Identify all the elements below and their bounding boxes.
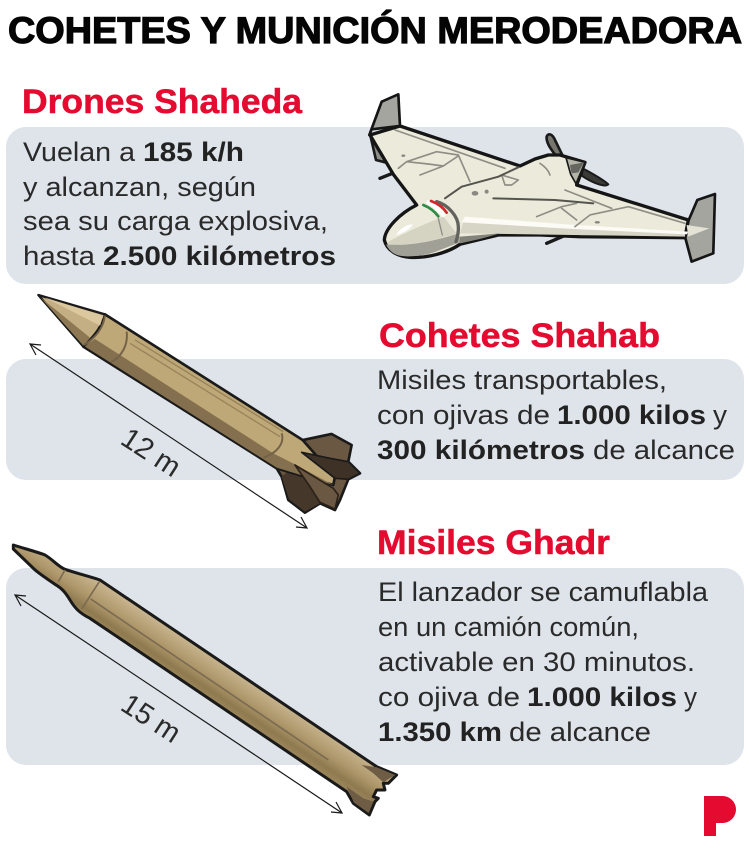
label: 15 m: 15 m <box>115 688 186 750</box>
text block: Ghadr description: y <box>684 682 697 712</box>
rocket long seams <box>130 340 283 437</box>
text block: Shaheda description: 185 k/h <box>143 137 244 167</box>
text block: Shahab description <box>377 365 735 465</box>
drone wing highlight <box>462 217 688 234</box>
nose collar <box>437 202 458 242</box>
drone lower body band <box>460 222 685 237</box>
rivets <box>401 154 600 224</box>
rocket side fin <box>295 465 338 509</box>
text block: Ghadr description: activable en 30 minutos. <box>378 647 695 677</box>
under fuselage shadow <box>460 233 500 243</box>
far wing fin underside <box>371 137 388 162</box>
missile fins <box>347 765 395 813</box>
drone nose underside shade <box>386 233 462 256</box>
text block: Ghadr description: co ojiva de <box>378 682 520 712</box>
text block: Ghadr description: en un camión común, <box>378 612 639 642</box>
propeller hub dark face <box>570 162 584 173</box>
drone body and wings <box>370 126 688 257</box>
text block: Ghadr description <box>378 577 709 747</box>
icon: Ghadr missile <box>13 545 397 815</box>
propeller hub <box>566 158 585 184</box>
icon: Shahab rocket <box>38 295 360 513</box>
panel: Ghadr background <box>6 568 744 765</box>
text block: Shahab description: con ojivas de <box>377 400 550 430</box>
rocket nose shadow <box>41 298 90 346</box>
title: COHETES Y MUNICIÓN MERODEADORA <box>8 9 742 51</box>
text block: Shaheda description: y alcanzan, según <box>23 172 256 202</box>
text block: Shaheda description: Vuelan a <box>23 137 136 167</box>
missile body <box>13 545 397 815</box>
logo: P <box>704 796 736 836</box>
lower propeller blade <box>582 168 608 185</box>
nose seam <box>438 218 442 235</box>
right fin <box>685 194 715 262</box>
heading: Drones Shaheda: Drones Shaheda <box>22 83 303 121</box>
nose highlight <box>396 224 413 235</box>
drone wing tip <box>687 225 709 237</box>
nose side shade <box>388 217 457 245</box>
text block: Shaheda description <box>23 137 336 271</box>
text block: Ghadr description: 1.000 kilos <box>527 682 677 712</box>
drone skids <box>380 172 568 243</box>
panel: Shaheda background <box>6 127 744 284</box>
rocket nose highlight <box>45 298 103 326</box>
text block: Shahab description: de alcance <box>593 435 735 465</box>
text block: Ghadr description: 1.350 km <box>378 717 502 747</box>
text block: Shahab description: 300 kilómetros <box>377 435 585 465</box>
text block: Shahab description: Misiles transportables, <box>377 365 667 395</box>
arrow: 12 m length <box>30 344 307 528</box>
rocket panel seams <box>84 316 282 458</box>
text block: Shahab description: y <box>713 400 728 430</box>
left fin <box>369 94 400 135</box>
rocket fins back <box>277 434 360 513</box>
icon: Shahed drone <box>369 94 715 262</box>
text block: Shahab description: 1.000 kilos <box>557 400 706 430</box>
label: 12 m: 12 m <box>115 422 186 484</box>
rocket body shadow <box>84 339 333 485</box>
text block: Shaheda description: 2.500 kilómetros <box>103 241 336 271</box>
rocket body <box>83 314 335 485</box>
flag stripes <box>423 201 447 216</box>
heading: Misiles Ghadr: Misiles Ghadr <box>377 524 610 562</box>
heading: Cohetes Shahab: Cohetes Shahab <box>379 317 660 355</box>
rocket dark lower fin <box>282 465 320 512</box>
rocket dark front fin <box>302 452 360 479</box>
text block: Shaheda description: sea su carga explosiva, <box>23 206 328 236</box>
rocket nose <box>38 295 105 347</box>
upper propeller blade <box>547 134 563 157</box>
panel lines <box>395 130 685 227</box>
arrow: 15 m length <box>15 595 342 813</box>
dark panel lines <box>445 167 593 203</box>
text block: Ghadr description: de alcance <box>509 717 651 747</box>
panel: Shahab background <box>6 359 744 480</box>
text block: Ghadr description: El lanzador se camuflabla <box>378 577 709 607</box>
missile seams <box>58 570 328 760</box>
text block: Shaheda description: hasta <box>23 241 96 271</box>
